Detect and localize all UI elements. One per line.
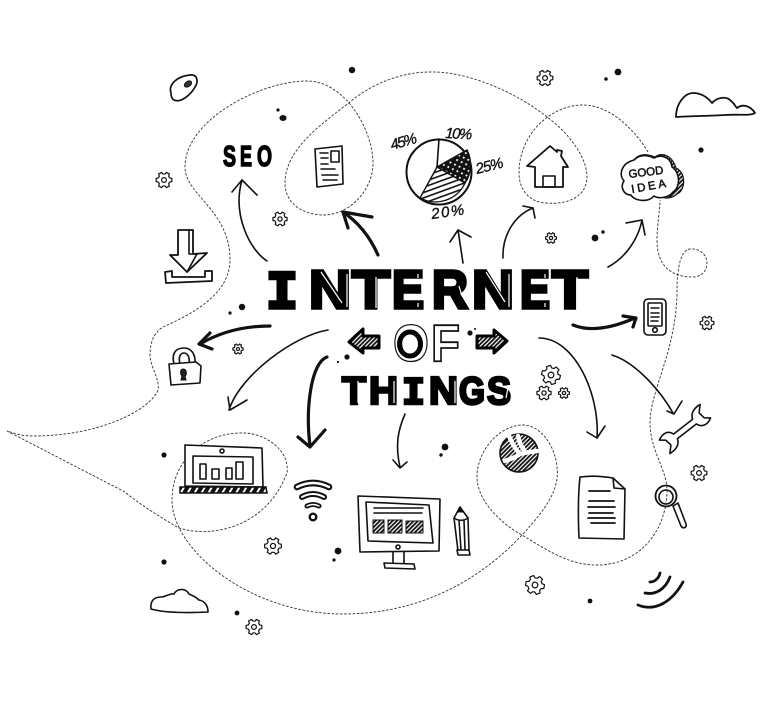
title: THINGS <box>342 370 511 416</box>
icon: gear top left <box>156 172 172 188</box>
title: OF <box>393 315 460 373</box>
title: INTERNET: E <box>520 260 550 320</box>
icon: gear by padlock <box>233 344 243 354</box>
title: OF: F <box>431 315 460 373</box>
chart: pie chart <box>406 139 472 204</box>
icon: gear below house <box>546 233 556 243</box>
icon: download <box>165 230 212 283</box>
icon: good idea cloud: IDEA <box>630 178 667 196</box>
title: INTERNET: R <box>432 260 468 320</box>
icon: signal waves <box>638 573 683 607</box>
icon: gear by document <box>273 212 287 226</box>
icon: gear below laptop <box>265 538 281 554</box>
arrow to monitor <box>393 414 407 468</box>
title: INTERNET: N <box>309 260 351 320</box>
right double arrow <box>477 330 507 353</box>
arrow to wrench <box>612 355 682 414</box>
icon: house <box>527 146 568 187</box>
pie label 20%: 20% <box>429 202 465 223</box>
title: OF: O <box>393 315 429 373</box>
icon: gear by wrench <box>691 465 707 481</box>
icon: wrench <box>657 404 713 454</box>
icon: gear by phone <box>700 316 714 330</box>
icon: gear bottom left <box>246 619 262 635</box>
icon: pencil <box>454 507 470 555</box>
title: THINGS: T <box>342 370 366 413</box>
icon: globe <box>500 434 538 472</box>
label: SEO: O <box>257 141 272 173</box>
icon: gear top centre <box>537 70 553 86</box>
arrow to phone <box>573 316 636 329</box>
icon: laptop <box>180 445 267 493</box>
icon: computer mouse <box>170 75 197 101</box>
pie label 45%: 45% <box>388 130 419 154</box>
arrow to SEO <box>232 180 267 261</box>
icon: gear centre right <box>537 386 551 400</box>
dashed speech-bubble outline <box>7 72 707 614</box>
icon: smartphone <box>644 299 666 335</box>
arrow to laptop <box>228 330 328 410</box>
pie label 25%: 25% <box>473 155 505 178</box>
icon: good idea cloud: GOOD <box>628 165 664 181</box>
label: SEO <box>223 141 272 173</box>
icon: padlock <box>169 348 201 385</box>
icon: top right cloud <box>676 93 755 117</box>
icon: desktop monitor <box>358 496 440 569</box>
thick arrow to wifi <box>298 357 327 447</box>
icon: document <box>315 146 343 187</box>
icon: magnifier <box>656 486 686 528</box>
title: INTERNET: N <box>472 260 514 320</box>
icon: small gear centre right <box>559 388 569 398</box>
title: THINGS: S <box>487 370 511 413</box>
left double arrow <box>349 329 379 353</box>
icon: gear bottom centre <box>524 574 546 596</box>
title: INTERNET: I <box>266 264 298 325</box>
icon: paper document <box>578 476 625 539</box>
label: SEO: E <box>240 141 252 173</box>
title: INTERNET: T <box>552 260 588 320</box>
icon: bottom left cloud <box>151 590 208 613</box>
icon: wifi <box>297 483 329 520</box>
title: INTERNET: T <box>352 260 390 320</box>
icon: good idea cloud <box>621 155 684 200</box>
dots <box>161 67 704 615</box>
label: SEO: S <box>223 141 236 173</box>
thick arrow to padlock <box>199 326 270 349</box>
title: THINGS: G <box>459 370 485 413</box>
arrow to document <box>539 338 605 438</box>
title: INTERNET <box>266 260 588 325</box>
arrow to good idea <box>608 220 645 267</box>
title: INTERNET: E <box>392 260 424 320</box>
thick arrow to document <box>343 212 378 255</box>
title: THINGS: H <box>369 370 398 413</box>
title: THINGS: I <box>402 372 425 416</box>
icon: large gear centre right <box>540 364 562 386</box>
pie label 10%: 10% <box>445 125 473 143</box>
arrow to house <box>503 206 535 258</box>
title: THINGS: N <box>429 370 458 413</box>
arrow up to pie <box>450 230 471 263</box>
